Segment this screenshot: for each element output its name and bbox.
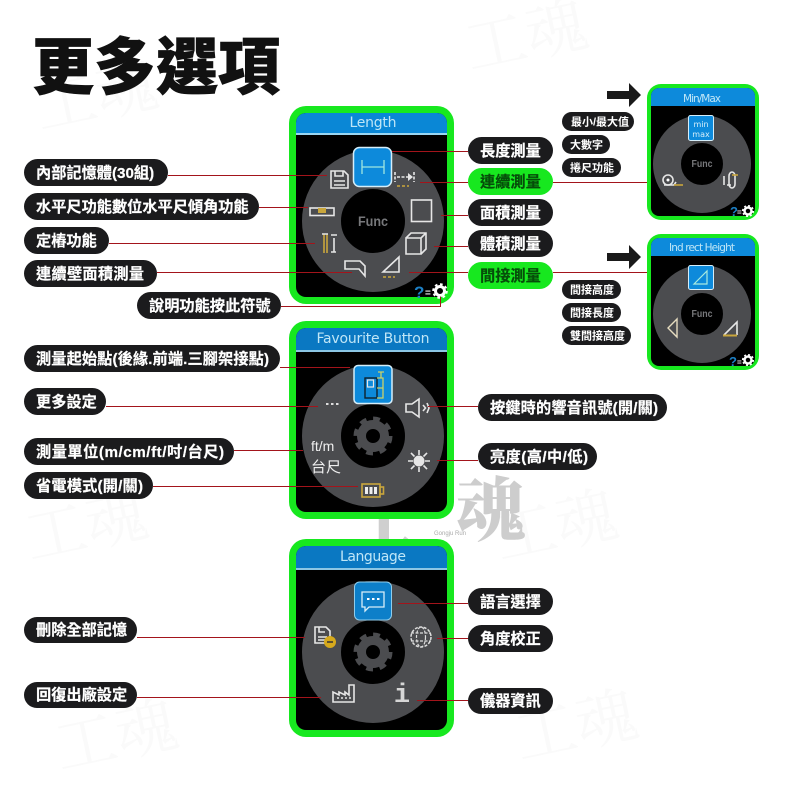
label: level (24, 193, 259, 220)
text: 工魂 (485, 465, 625, 578)
icon: help equals gear (730, 204, 753, 219)
label: indirect: 間接測量 (480, 267, 541, 285)
small label: big digits (562, 135, 610, 154)
small label: double indirect height: 雙間接高度 (570, 328, 625, 342)
icon: more dots (326, 403, 338, 405)
label: key sound (478, 394, 667, 421)
label: factory reset (24, 682, 137, 708)
label: length (468, 137, 553, 164)
icon: battery (362, 484, 384, 497)
small label: tape (562, 158, 621, 177)
icon: indirect triangle (383, 257, 399, 277)
label: volume (468, 230, 553, 257)
panel header: Favourite Button (296, 328, 447, 352)
panel: Min/Max (647, 84, 759, 220)
label: help: 說明功能按此符號 (149, 297, 270, 315)
icon: min max tile: max (692, 130, 710, 139)
donut menu (667, 129, 737, 199)
icon: help equals gear: ? (729, 354, 737, 369)
label: stake: 定樁功能 (36, 232, 97, 250)
icon: help equals gear: ? (414, 283, 424, 302)
label: continuous: 連續測量 (480, 173, 541, 191)
panel header: Language: Language (340, 549, 406, 565)
panel: Indirect Height (647, 234, 759, 370)
center label: Func: Func (692, 309, 713, 320)
label: brightness: 亮度(高/中/低) (490, 448, 588, 466)
small label: tape: 捲尺功能 (570, 160, 614, 174)
icon: help equals gear: ? (730, 204, 738, 219)
label: level: 水平尺功能數位水平尺傾角功能 (36, 198, 249, 216)
small label: indirect height (562, 280, 621, 299)
panel header: Length: Length (350, 115, 396, 131)
label: delete memory: 刪除全部記憶 (36, 621, 127, 639)
icon: memory floppy (331, 171, 348, 188)
label: length: 長度測量 (480, 142, 541, 160)
icon: start point tile (354, 366, 392, 404)
label: start point: 測量起始點(後緣.前端.三腳架接點) (36, 350, 269, 368)
icon: speaker (406, 399, 429, 417)
label: indirect (468, 262, 553, 289)
label: angle calibration (468, 625, 553, 652)
panel header: Language (296, 546, 447, 570)
text: 工魂 (45, 675, 185, 788)
icon: wall area (345, 261, 365, 276)
label: brightness (478, 443, 597, 470)
icon: help equals gear: = (425, 288, 431, 299)
icon: indirect tile (688, 266, 714, 290)
watermark logo: 工 (352, 471, 416, 563)
small label: min max (562, 112, 634, 131)
donut menu (322, 600, 424, 704)
icon: spirit level (310, 208, 334, 216)
icon: info: i (394, 681, 410, 711)
label: continuous (468, 168, 553, 195)
small label: min max: 最小/最大值 (571, 114, 629, 128)
label: language (468, 588, 553, 615)
label: more settings (24, 388, 106, 415)
label: power saving: 省電模式(開/關) (36, 477, 143, 495)
donut menu (667, 279, 737, 349)
label: wall area (24, 260, 157, 287)
icon: center gear (356, 419, 390, 453)
icon: help equals gear (729, 354, 753, 369)
icon: continuous measure (395, 172, 414, 186)
donut menu (322, 170, 424, 272)
label: memory: 內部記憶體(30組) (36, 164, 154, 182)
icon: stake (322, 234, 337, 253)
icon: length tile (354, 148, 392, 186)
icon: help equals gear: = (737, 208, 742, 217)
icon: indirect length (668, 319, 677, 337)
label: delete memory (24, 617, 137, 643)
small label: double indirect height (562, 326, 631, 345)
small label: big digits: 大數字 (570, 138, 603, 152)
label: memory (24, 159, 168, 186)
small label: indirect length: 間接長度 (570, 306, 614, 320)
icon: calibration globe (411, 627, 431, 647)
watermark logo (352, 455, 526, 563)
text: 工魂 (15, 465, 155, 578)
icon: double indirect (723, 322, 737, 336)
panel header: Length (296, 113, 447, 135)
icon: center gear (356, 635, 390, 669)
icon: factory (333, 685, 354, 702)
center label: Func: Func (358, 213, 388, 229)
label: units: 測量單位(m/cm/ft/吋/台尺) (36, 443, 224, 461)
text: units: 台尺 (311, 459, 341, 476)
icon: language chat tile (354, 582, 392, 620)
text: 工魂 (505, 665, 645, 778)
panel header: Indirect Height: Ind rect Height (669, 242, 735, 254)
icon: help equals gear: = (737, 358, 742, 367)
watermark logo: 魂 (456, 455, 526, 556)
panel header: Favourite Button: Favourite Button (316, 331, 430, 347)
panel: Favourite Button (289, 321, 454, 519)
label: units (24, 438, 234, 465)
small label: indirect height: 間接高度 (570, 282, 614, 296)
leader lines (106, 152, 647, 700)
label: stake (24, 227, 109, 254)
label: area: 面積測量 (480, 204, 541, 222)
icon: cube (406, 233, 426, 254)
watermark logo: Gongju Run (434, 531, 466, 537)
center label: Func: Func (692, 159, 713, 170)
arrow: to Min/Max (607, 83, 641, 107)
panel header: Min/Max: Min/Max (683, 93, 721, 105)
text: units: ft/m (311, 438, 334, 454)
icon: help equals gear (414, 283, 447, 302)
icon: square (412, 200, 432, 222)
small label: indirect length (562, 303, 621, 322)
label: start point (24, 345, 280, 372)
label: angle calibration: 角度校正 (480, 630, 541, 648)
label: help (137, 292, 281, 319)
panel: Language (289, 539, 454, 737)
label: device info (468, 688, 553, 714)
label: device info: 儀器資訊 (480, 692, 541, 710)
label: more settings: 更多設定 (36, 393, 97, 411)
label: key sound: 按鍵時的響音訊號(開/關) (490, 399, 658, 417)
icon: min max tile (688, 116, 714, 140)
label: factory reset: 回復出廠設定 (36, 686, 127, 704)
label: power saving (24, 472, 153, 499)
text: units (311, 438, 341, 476)
label: language: 語言選擇 (480, 593, 541, 611)
title: 更多選項 (32, 34, 280, 103)
icon: min max tile: min (693, 120, 709, 129)
icon: brightness (403, 445, 435, 477)
icon: large digits (724, 172, 738, 188)
label: volume: 體積測量 (480, 235, 541, 253)
icon: delete memory (315, 627, 336, 648)
text: 工魂 (25, 35, 165, 148)
donut menu (322, 384, 424, 488)
label: area (468, 199, 553, 226)
panel: Length (289, 106, 454, 304)
icon: tape (663, 175, 683, 185)
label: wall area: 連續壁面積測量 (36, 265, 144, 283)
arrow: to Indirect Height (607, 245, 641, 269)
